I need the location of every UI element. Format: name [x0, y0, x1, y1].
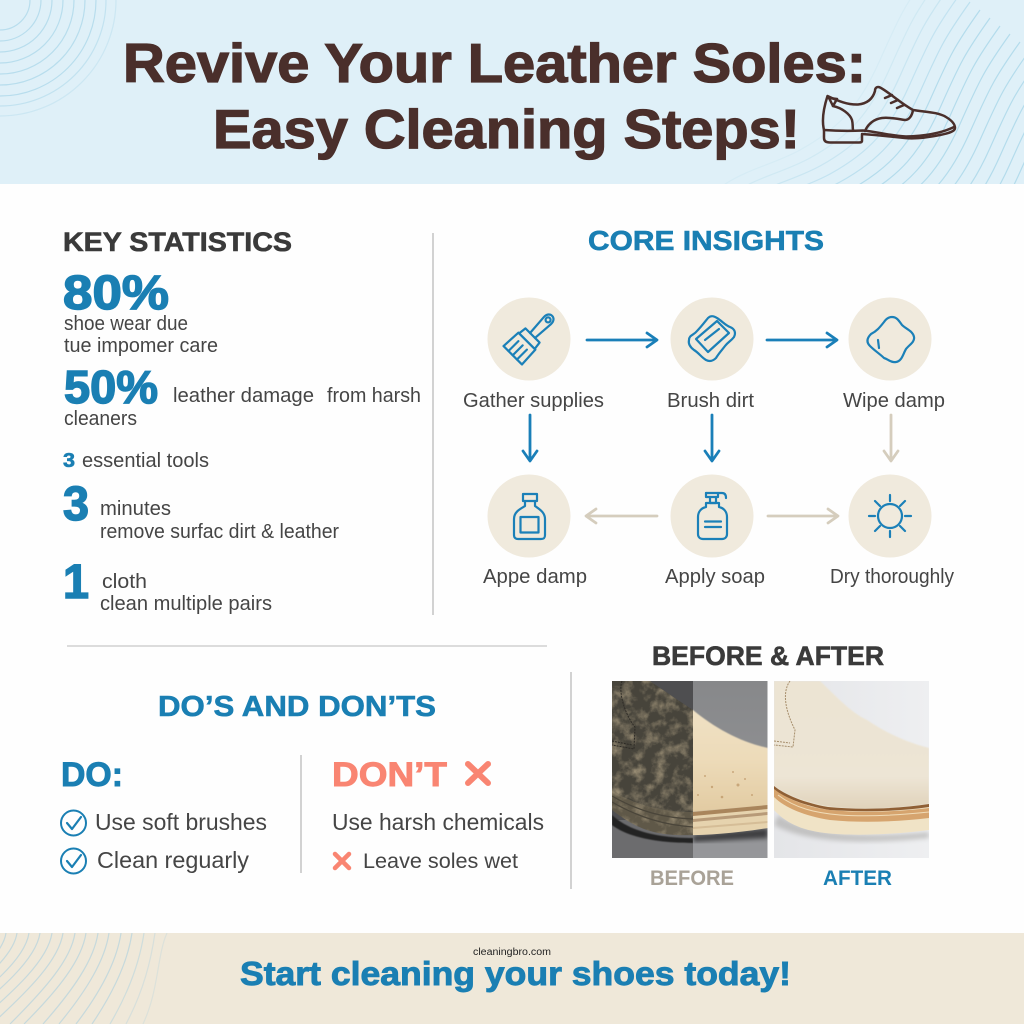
stat: 50%: from harsh [327, 385, 421, 407]
column: do [61, 756, 267, 874]
label: after: AFTER [823, 867, 892, 890]
stat: 50%: 50% [64, 361, 158, 413]
check item: Use soft brushes [95, 809, 267, 835]
heading: key statistics: KEY STATISTICS [63, 227, 292, 257]
photo: before [612, 681, 768, 858]
stat: 1 cloth [63, 556, 272, 615]
arrow [586, 509, 657, 523]
step: wipe damp [843, 298, 945, 412]
arrow [884, 415, 898, 461]
cross item: Leave soles wet [363, 850, 518, 873]
arrow [705, 415, 719, 461]
stat: 3 tools: essential tools [82, 450, 209, 472]
photo: after [774, 681, 929, 858]
step: apply soap: Apply soap [665, 566, 765, 588]
heading: before and after: BEFORE & AFTER [652, 641, 884, 671]
panel: do's and don'ts [61, 691, 544, 874]
title: Easy Cleaning Steps! [213, 98, 800, 160]
stat: 80%: tue impomer care [64, 335, 218, 357]
stat: 1 cloth: cloth [102, 571, 147, 593]
panel: core insights [463, 225, 954, 588]
step: gather supplies [463, 298, 604, 412]
stat: 3 minutes: 3 [63, 478, 89, 531]
title: Revive Your Leather Soles: [123, 32, 866, 94]
column: don't: Use harsh chemicals [332, 809, 544, 835]
step: wipe damp: Wipe damp [843, 390, 945, 412]
icon: shoe [823, 87, 955, 142]
watermark: cleaningbro.com [473, 947, 551, 958]
step: appe damp [483, 474, 587, 588]
arrow [768, 509, 838, 523]
label: before: BEFORE [650, 867, 734, 890]
stat: 1 cloth: 1 [63, 556, 89, 609]
clean half of shoe [693, 710, 768, 812]
stat: 50%: cleaners [64, 408, 137, 430]
arrow [523, 415, 537, 461]
step: brush dirt [667, 298, 754, 412]
step: gather supplies: Gather supplies [463, 390, 604, 412]
stat: 1 cloth: clean multiple pairs [100, 593, 272, 615]
step: brush dirt: Brush dirt [667, 390, 754, 412]
stat: 80%: shoe wear due [64, 313, 188, 335]
stat: 80% [63, 267, 218, 357]
step: appe damp: Appe damp [483, 566, 587, 588]
arrow [767, 333, 837, 347]
step: dry thoroughly [830, 474, 954, 588]
heading: core insights: CORE INSIGHTS [588, 225, 824, 256]
column: don't: DON’T [332, 756, 447, 794]
call to action: Start cleaning your shoes today! [240, 955, 791, 992]
panel: key statistics [63, 227, 421, 615]
step: apply soap [665, 474, 765, 588]
dark half overlay [612, 681, 693, 858]
title [123, 32, 866, 160]
stat: 80%: 80% [63, 267, 169, 320]
check item: Clean reguarly [97, 847, 249, 873]
icon: large cross [468, 764, 488, 783]
step: dry thoroughly: Dry thoroughly [830, 566, 954, 588]
stat: 50%: leather damage [173, 385, 314, 407]
heading: do's and don'ts: DO’S AND DON’TS [158, 691, 436, 723]
stat: 3 tools: 3 [63, 450, 75, 472]
panel: before and after [612, 641, 929, 890]
stat: 3 minutes [63, 478, 339, 543]
arrow [587, 333, 657, 347]
column: do: DO: [61, 756, 123, 794]
stat: 50% [64, 361, 421, 430]
column: don't [332, 756, 544, 873]
header banner [0, 0, 1024, 184]
stat: 3 minutes: remove surfac dirt & leather [100, 521, 339, 543]
stat: 3 minutes: minutes [100, 498, 171, 520]
footer banner [0, 933, 1024, 1024]
